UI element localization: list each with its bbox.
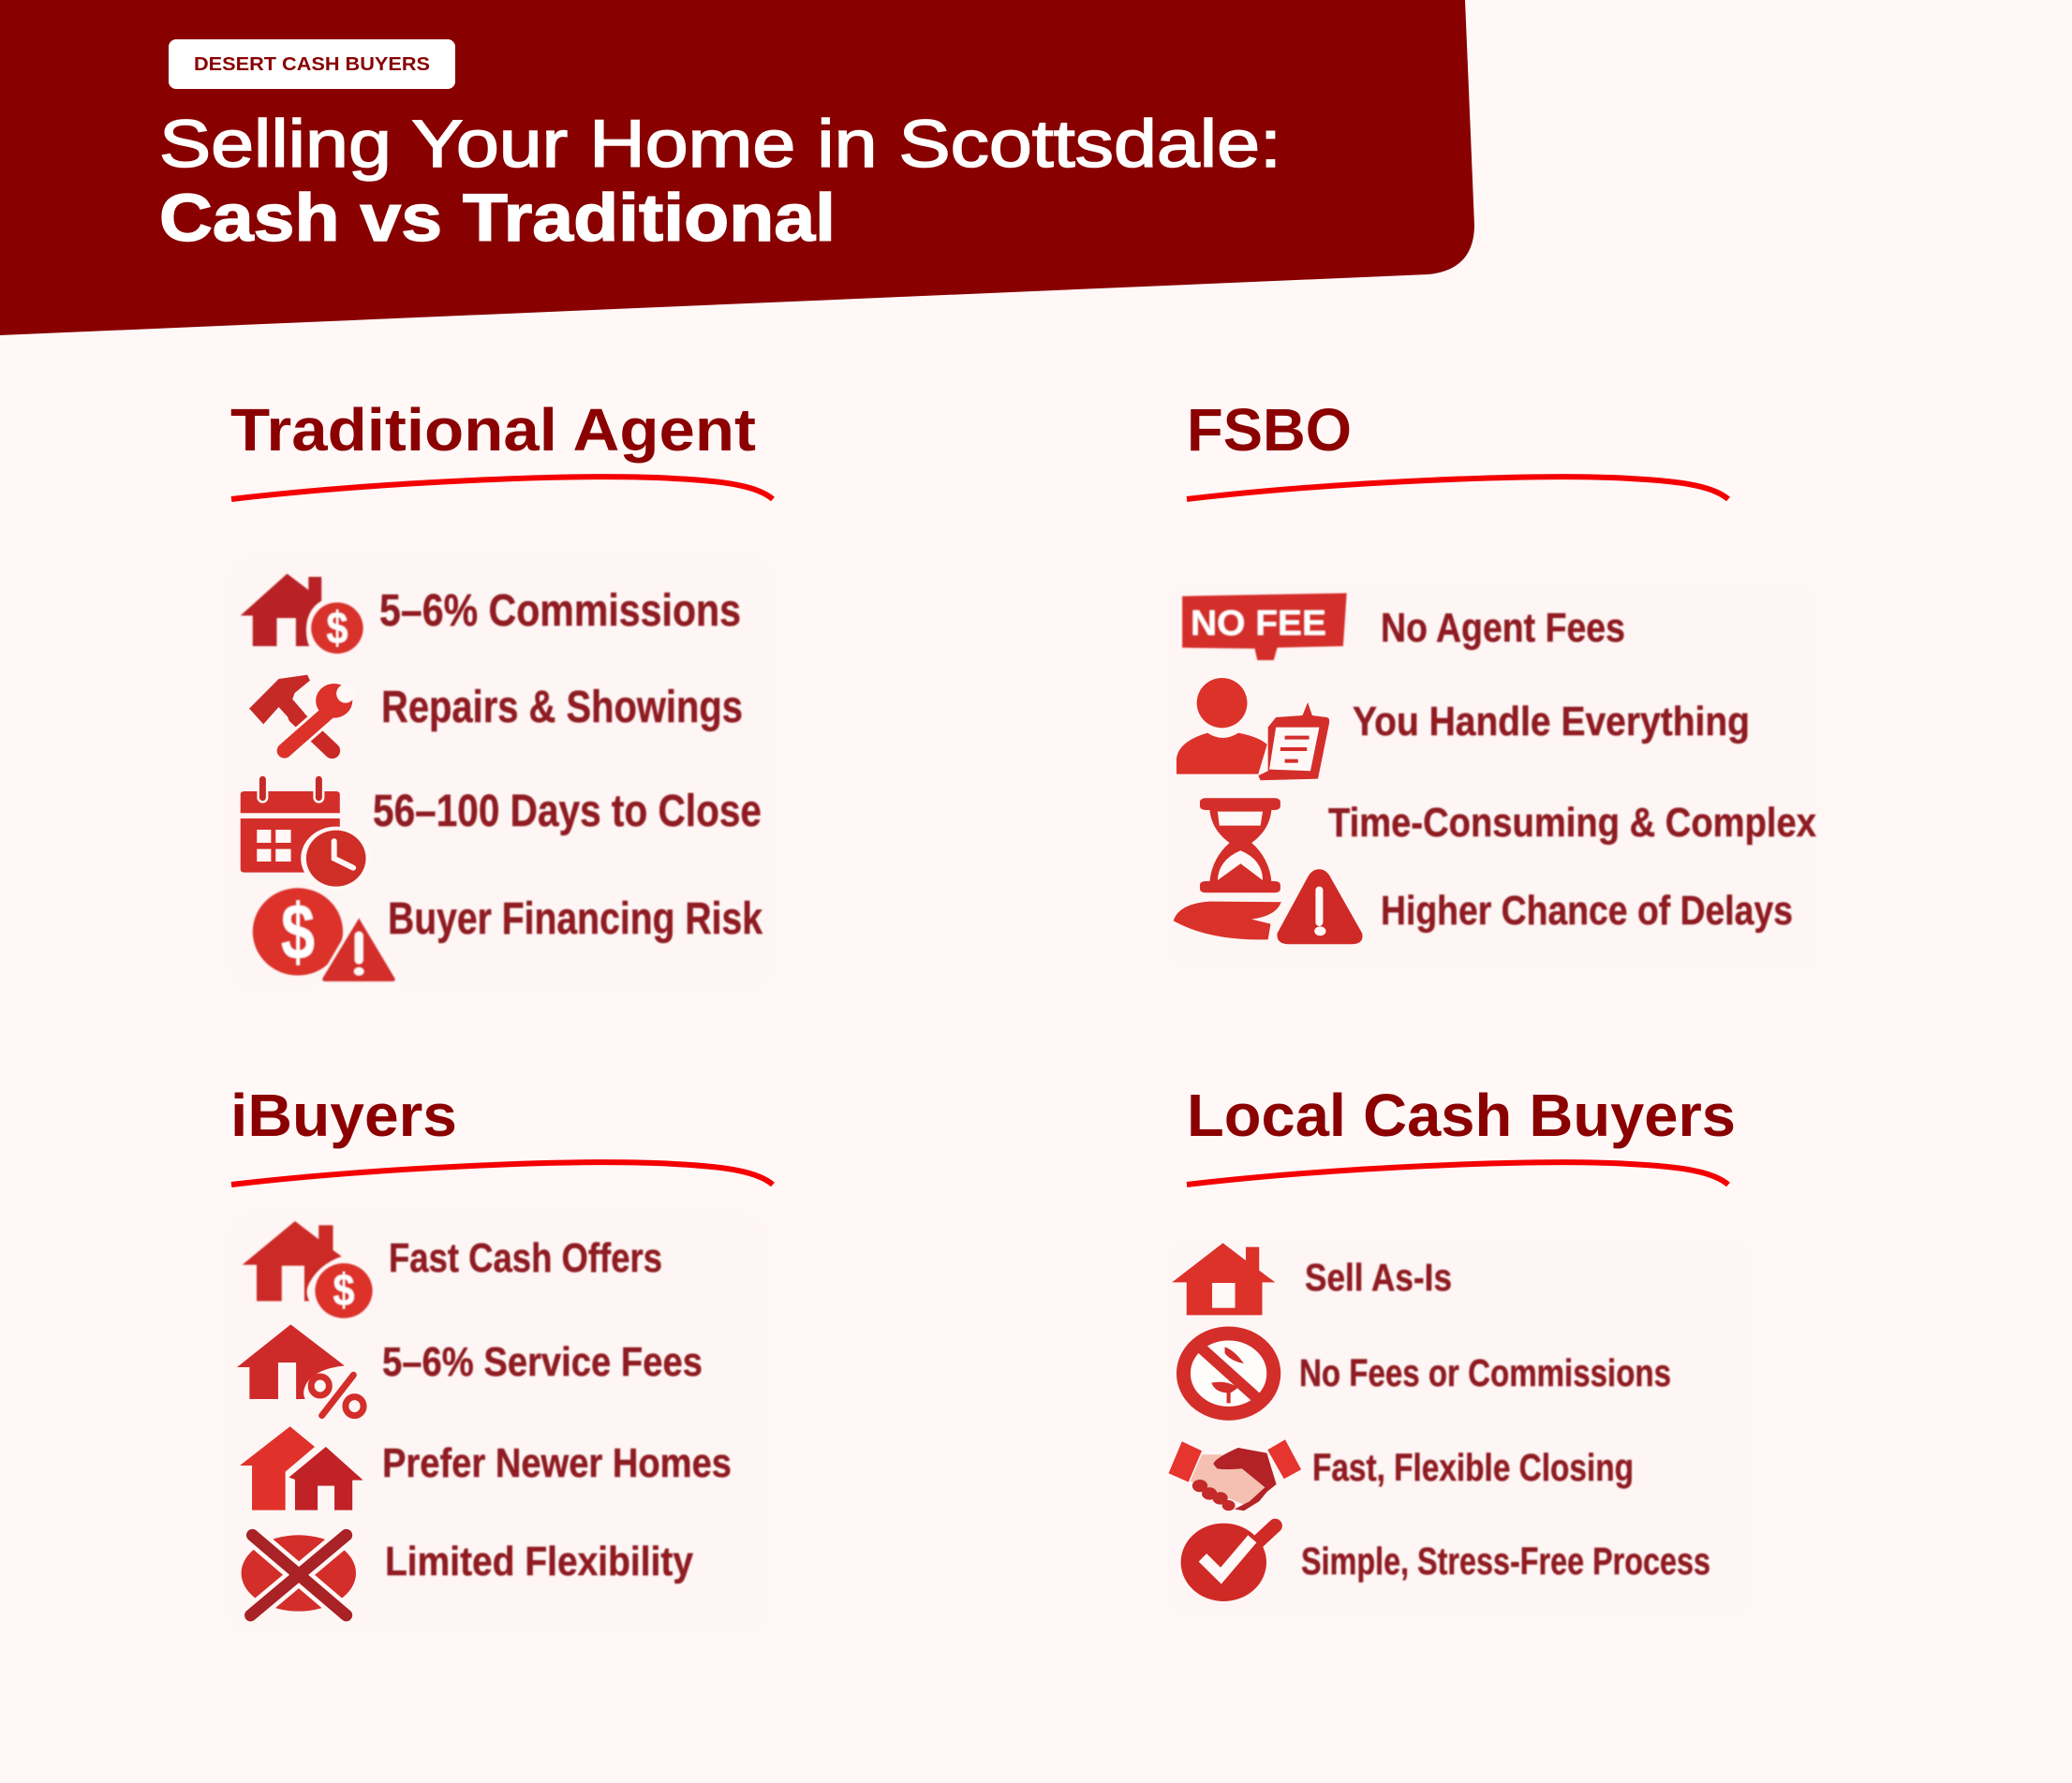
- icon: hourglass on hand: [1174, 798, 1281, 939]
- underline: [1187, 477, 1728, 499]
- icon: no fee badge: [1182, 593, 1347, 660]
- panel: ibuyers: [225, 1082, 773, 1639]
- icon: house with dollar: [243, 1221, 373, 1319]
- underline: [231, 477, 773, 499]
- label: no agent fees: No Agent Fees: [1381, 605, 1625, 651]
- label: no fees or commissions: No Fees or Commissions: [1299, 1351, 1671, 1394]
- label: days to close: 56–100 Days to Close: [373, 787, 762, 836]
- icon: house with dollar: [241, 574, 363, 654]
- heading: local cash buyers: Local Cash Buyers: [1187, 1082, 1736, 1149]
- panel: traditional agent: [225, 396, 777, 993]
- icon: no fee badge: NO FEE: [1191, 604, 1326, 643]
- icon: crossed circle: [242, 1535, 356, 1615]
- label: repairs: Repairs & Showings: [381, 683, 743, 732]
- title line 2: Cash vs Traditional: [159, 182, 836, 256]
- heading: fsbo: FSBO: [1187, 396, 1352, 464]
- icon: two houses: [240, 1426, 363, 1510]
- underline: [231, 1162, 773, 1185]
- heading: ibuyers: iBuyers: [230, 1082, 457, 1149]
- icon: dollar with warning: [253, 888, 403, 986]
- brand badge: DESERT CASH BUYERS: [194, 54, 430, 75]
- icon: house with dollar: $: [326, 604, 348, 654]
- title line 1: Selling Your Home in Scottsdale:: [159, 108, 1281, 182]
- icon: hammer and wrench: [249, 675, 355, 751]
- icon: handshake: [1169, 1439, 1301, 1510]
- icon: house with dollar: $: [333, 1266, 355, 1316]
- label: commissions: 5–6% Commissions: [379, 586, 741, 636]
- label: higher chance of delays: Higher Chance of Delays: [1381, 888, 1793, 934]
- panel: local cash buyers: [1166, 1082, 1756, 1620]
- panel: fsbo: [1166, 396, 1822, 974]
- label: financing risk: Buyer Financing Risk: [388, 894, 762, 944]
- icon: house with percent: [237, 1324, 363, 1416]
- label: you handle everything: You Handle Everything: [1353, 699, 1750, 744]
- label: service fees: 5–6% Service Fees: [382, 1339, 703, 1385]
- label: limited flexibility: Limited Flexibility: [385, 1539, 693, 1584]
- icon: no fees sign: [1183, 1334, 1274, 1413]
- label: time consuming: Time-Consuming & Complex: [1328, 800, 1816, 846]
- icon: check mark: [1181, 1524, 1275, 1601]
- label: fast flexible closing: Fast, Flexible Closing: [1312, 1446, 1634, 1489]
- icon: calendar and clock: [241, 779, 371, 891]
- label: sell as-is: Sell As-Is: [1305, 1256, 1452, 1299]
- label: simple process: Simple, Stress-Free Process: [1301, 1540, 1710, 1583]
- label: fast cash offers: Fast Cash Offers: [389, 1235, 662, 1281]
- label: prefer newer homes: Prefer Newer Homes: [382, 1440, 732, 1486]
- icon: person with clipboard: [1177, 678, 1329, 780]
- brand badge: [169, 39, 455, 89]
- icon: dollar with warning: $: [281, 888, 315, 976]
- heading: traditional agent: Traditional Agent: [230, 396, 756, 464]
- icon: house: [1172, 1243, 1275, 1315]
- icon: warning triangle: [1277, 869, 1363, 944]
- underline: [1187, 1162, 1728, 1185]
- header banner: [0, 0, 1474, 335]
